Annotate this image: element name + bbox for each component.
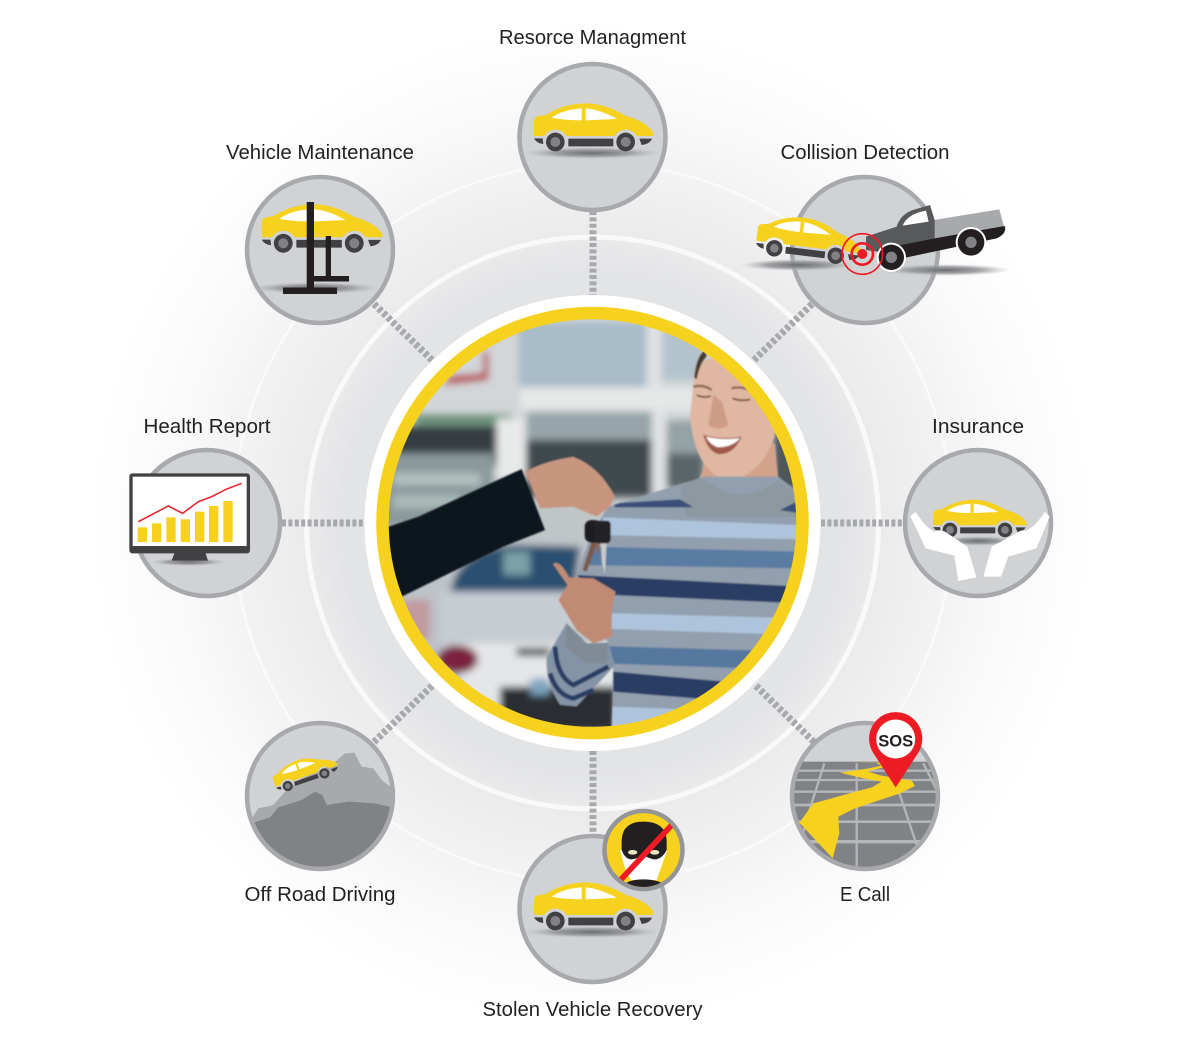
circle xyxy=(247,723,393,869)
circle xyxy=(247,177,393,323)
panel: Resource Management xyxy=(499,27,686,210)
icon: thief badge xyxy=(604,811,682,897)
circle outline xyxy=(792,723,938,869)
icon: mountains xyxy=(252,752,391,867)
photo xyxy=(380,310,807,733)
circle xyxy=(520,64,666,210)
hair xyxy=(694,351,707,379)
white outer disc xyxy=(364,295,820,751)
icon: car climbing xyxy=(270,748,341,795)
icon: SOS pin xyxy=(869,712,922,788)
circle xyxy=(134,450,280,596)
central photo: key handover xyxy=(364,295,820,751)
icon: crash scene xyxy=(740,205,1011,276)
dark sleeve arm xyxy=(387,469,545,597)
car shadow xyxy=(522,147,662,159)
mouth xyxy=(703,435,742,454)
circle outline xyxy=(247,723,393,869)
panel: Stolen Vehicle Recovery xyxy=(482,811,702,1021)
circle xyxy=(520,836,666,982)
panel: E Call xyxy=(787,712,943,906)
panel: Vehicle Maintenance xyxy=(226,142,414,323)
car shadow xyxy=(522,926,662,938)
dotted connectors xyxy=(282,211,905,835)
icon: car xyxy=(933,500,1027,537)
concentric rings xyxy=(232,163,952,883)
icon: car xyxy=(534,103,653,151)
label: Collision Detection xyxy=(780,142,950,164)
face xyxy=(690,358,775,479)
label: Insurance xyxy=(932,416,1024,438)
icon: car xyxy=(534,882,653,930)
yellow ring xyxy=(382,313,802,733)
panel: Collision Detection xyxy=(740,142,1011,323)
car shadow xyxy=(938,536,1018,546)
keys xyxy=(583,542,597,572)
circle xyxy=(792,177,938,323)
panel: Off Road Driving xyxy=(244,723,397,906)
man and hands xyxy=(387,351,803,733)
giving hand xyxy=(525,457,615,517)
brows and eyes xyxy=(692,384,748,392)
neck xyxy=(698,442,779,479)
icon: road map xyxy=(794,762,936,867)
icon: monitor with chart xyxy=(129,473,250,566)
panel: Health Report xyxy=(129,416,280,596)
forearm sleeve xyxy=(546,623,615,707)
sweater with stripes xyxy=(573,473,803,733)
label: Resorce Managment xyxy=(499,27,686,49)
label: Off Road Driving xyxy=(244,884,396,906)
SOS text: SOS xyxy=(878,732,913,750)
icon: car on lift xyxy=(262,202,382,294)
icon: protecting hands xyxy=(910,512,1050,581)
label: Vehicle Maintenance xyxy=(226,142,414,164)
panel: Insurance xyxy=(905,416,1051,596)
receiving hand xyxy=(553,563,616,643)
label: Stolen Vehicle Recovery xyxy=(482,999,702,1021)
nose xyxy=(708,395,728,428)
circle xyxy=(905,450,1051,596)
label: Health Report xyxy=(144,416,271,438)
label: E Call xyxy=(840,884,890,906)
lift shadow xyxy=(249,282,381,294)
circle xyxy=(792,723,938,869)
